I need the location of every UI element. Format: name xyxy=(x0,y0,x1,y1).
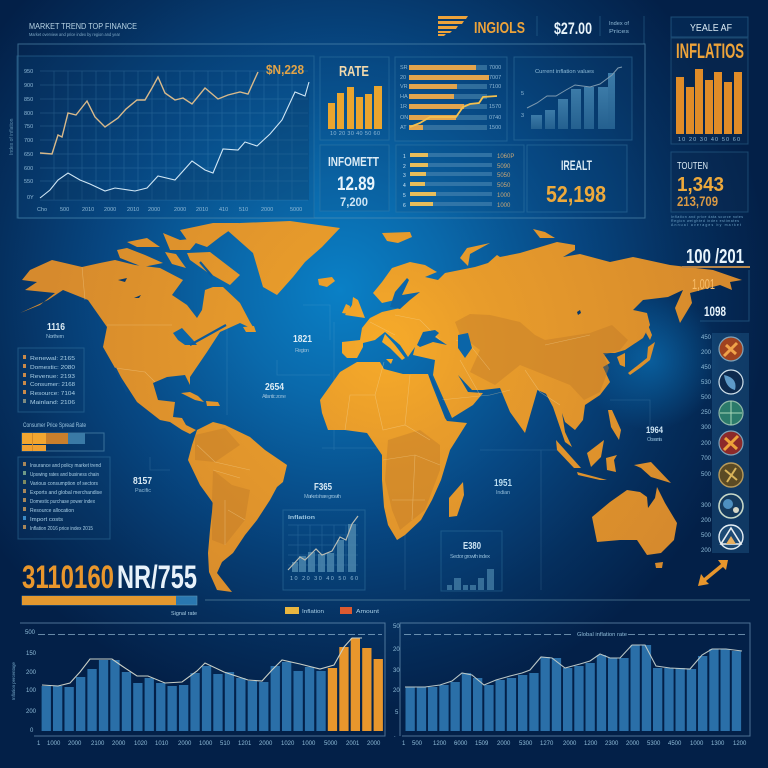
axis labels: 2000 xyxy=(259,741,273,747)
map: uk and ireland xyxy=(345,297,365,318)
axis labels: 100 xyxy=(26,688,37,694)
chart: bottom right xyxy=(393,623,750,747)
text: Annual averages by market xyxy=(671,223,741,227)
map label: f365: F365 xyxy=(314,482,332,493)
axis labels: 510 xyxy=(239,207,248,213)
axis labels: 650 xyxy=(24,152,33,158)
map: south america xyxy=(188,422,287,592)
legend: bottom: Inflation xyxy=(302,609,324,615)
swatches xyxy=(23,355,26,403)
line xyxy=(410,96,497,127)
labels: 7100 xyxy=(489,84,501,90)
panel: year label xyxy=(671,17,748,37)
heading: Consumer Price Spread Rate xyxy=(23,423,87,429)
axis labels: 200 xyxy=(26,709,37,715)
map label: 8157: Pacific xyxy=(135,488,151,494)
axis labels: 2010 xyxy=(82,207,94,213)
icon: green globe xyxy=(719,401,743,425)
rows: Domestic purchase power index xyxy=(30,499,95,505)
orange bars xyxy=(328,638,383,731)
sub value: 213,709 xyxy=(677,193,718,209)
axis labels: 2000 xyxy=(367,741,381,747)
value: 1,343 xyxy=(677,174,724,196)
axis labels: 850 xyxy=(24,97,33,103)
axis labels: 2000 xyxy=(626,741,640,747)
axis labels: 5300 xyxy=(519,741,533,747)
panel: rate bars xyxy=(320,57,389,140)
labels: 200 xyxy=(701,441,712,447)
progress bar xyxy=(22,596,197,617)
panel: inflatios bars xyxy=(671,38,748,144)
labels xyxy=(701,335,712,554)
labels: 200 xyxy=(701,548,712,554)
map: southeast asia islands xyxy=(556,440,581,468)
map label: 2654 xyxy=(262,382,286,400)
axis labels: 1300 xyxy=(711,741,725,747)
axis labels: 2300 xyxy=(605,741,619,747)
axis labels: 50 xyxy=(393,624,400,630)
map: darker regions xyxy=(195,314,628,545)
map label: 1964: Oceania xyxy=(647,437,663,443)
grid xyxy=(288,525,358,572)
map: korea xyxy=(617,353,625,367)
axis labels: 1270 xyxy=(540,741,554,747)
map: svalbard xyxy=(382,232,412,243)
labels: 20 xyxy=(400,75,406,81)
values: 5090 xyxy=(497,164,511,170)
bars xyxy=(676,69,742,134)
title: Market overview and price index by region and year xyxy=(29,32,120,37)
axis labels: 950 xyxy=(24,69,33,75)
map: north america xyxy=(20,260,255,434)
panel: progress rows: 4 xyxy=(403,183,406,189)
chart: line series bottom xyxy=(40,82,309,200)
arrow xyxy=(698,560,728,586)
icon: orange tool xyxy=(719,337,743,361)
axis labels: 410 xyxy=(219,207,228,213)
heading: Inflation xyxy=(288,515,316,521)
map: taymyr islands xyxy=(533,229,555,238)
axis labels: 600 xyxy=(24,166,33,172)
axis labels: 500 xyxy=(25,630,36,636)
heading: ingiols: INGIOLS xyxy=(474,20,525,37)
icon: blue globe xyxy=(719,494,743,518)
line xyxy=(288,516,358,570)
axis labels: 2000 xyxy=(112,741,126,747)
map: interior land mass xyxy=(375,262,700,400)
panel: touten xyxy=(671,152,748,212)
panel: progress rows: 3 xyxy=(403,173,406,179)
map: land masses xyxy=(20,221,742,592)
map label: f365 xyxy=(304,482,341,500)
icon: red tools xyxy=(719,431,743,455)
text: Region weighted index estimates xyxy=(671,219,739,223)
rows: Inflation 2016 price index 2015 xyxy=(30,526,93,532)
text: Prices xyxy=(609,29,629,35)
icon: gold emblem xyxy=(719,463,743,487)
chart grid xyxy=(40,71,308,200)
axis labels: 1201 xyxy=(238,741,252,747)
legend box: items xyxy=(18,457,110,539)
labels: 500 xyxy=(701,472,712,478)
chart: bottom left xyxy=(11,623,385,747)
map label: f365: Market share growth xyxy=(304,494,341,500)
map: australia xyxy=(592,487,677,555)
big figure: 3110160 xyxy=(22,559,114,595)
panel: small bars e380 xyxy=(441,531,502,591)
frame xyxy=(400,623,750,736)
axis labels: 800 xyxy=(24,111,33,117)
bars xyxy=(328,86,382,129)
labels: 450 xyxy=(701,365,712,371)
map label: 1821: 1821 xyxy=(293,334,312,345)
values: 1000 xyxy=(497,203,511,209)
labels: 1570 xyxy=(489,104,501,110)
panel: progress rows: 6 xyxy=(403,203,406,209)
panel: rate bars: 10 20 30 40 50 60 xyxy=(330,131,380,137)
map label: 8157: 8157 xyxy=(133,476,152,487)
map label: 2654: Atlantic zone xyxy=(262,394,286,400)
icon: striped flag logo xyxy=(438,16,468,36)
panel: progress rows xyxy=(396,145,524,212)
axis labels: 700 xyxy=(24,138,33,144)
blue bars xyxy=(42,660,326,731)
labels: 250 xyxy=(701,410,712,416)
values: 1060P xyxy=(497,154,514,160)
axis labels: Index of inflation xyxy=(9,118,15,155)
heading: IREALT xyxy=(561,157,592,173)
value: E380 xyxy=(463,541,481,552)
labels: 200 xyxy=(701,518,712,524)
axis labels: 900 xyxy=(24,83,33,89)
labels: 7007 xyxy=(489,75,501,81)
axis labels: 2010 xyxy=(127,207,139,213)
frame xyxy=(20,623,385,736)
labels: 1R xyxy=(400,104,407,110)
map: water overlays xyxy=(173,278,472,358)
panel: small bars e380: Sector growth index xyxy=(450,554,490,560)
map: borders xyxy=(82,267,590,545)
heading: RATE xyxy=(339,63,369,80)
map: novaya zemlya xyxy=(460,243,490,266)
rows: Insurance and policy market trend xyxy=(30,463,101,469)
world map xyxy=(20,221,742,592)
panel: small trend chart: 10 20 30 40 50 60 xyxy=(290,576,358,582)
connector lines xyxy=(150,305,650,590)
rows: Renewal: 2165 xyxy=(30,356,75,362)
rows: Consumer: 2168 xyxy=(30,382,75,388)
swatches xyxy=(23,462,26,529)
rows: Import costs xyxy=(30,517,63,523)
axis labels: 2001 xyxy=(346,741,360,747)
values: 5050 xyxy=(497,183,511,189)
value: 52,198 xyxy=(546,181,606,207)
axis labels: 5300 xyxy=(647,741,661,747)
header: ingiols and value xyxy=(438,16,629,38)
axis labels: 1000 xyxy=(47,741,61,747)
value block: 100 / 201: 100 /201 xyxy=(686,246,744,268)
title: MARKET TREND TOP FINANCE xyxy=(29,22,137,31)
axis labels: 1000 xyxy=(690,741,704,747)
axis labels xyxy=(11,630,381,747)
axis labels: 5000 xyxy=(290,207,302,213)
panel: progress rows: 2 xyxy=(403,164,406,170)
title xyxy=(29,22,137,37)
labels: 200 xyxy=(701,350,712,356)
axis labels: 150 xyxy=(26,651,37,657)
axis labels: 4500 xyxy=(668,741,682,747)
axis labels: 2010 xyxy=(196,207,208,213)
axis labels: 20 xyxy=(393,688,400,694)
map label: 1821: Region xyxy=(295,348,309,354)
labels: VR xyxy=(400,84,408,90)
map label: 1951: 1951 xyxy=(494,478,512,489)
rows: Domestic: 2080 xyxy=(30,365,75,371)
axis labels: 0Y xyxy=(27,195,34,201)
map label: 1964 xyxy=(646,425,663,443)
map: small dark lakes xyxy=(118,278,581,315)
map label: 1951: Indian xyxy=(496,490,510,496)
panel: blue bar chart with trend: 5 xyxy=(521,91,524,97)
map label: 1116: Northern xyxy=(46,334,64,340)
axis labels: 5000 xyxy=(324,741,338,747)
axis labels xyxy=(393,624,747,747)
value small: 7,200 xyxy=(340,195,368,209)
bars xyxy=(410,153,436,206)
value white: 1098 xyxy=(704,303,726,319)
panel: progress rows: 1 xyxy=(403,154,406,160)
value orange: 1,001 xyxy=(692,276,715,293)
axis labels: 1200 xyxy=(733,741,747,747)
legend: bottom xyxy=(285,607,380,615)
rows: Upswing rates and business chain xyxy=(30,472,99,478)
axis labels: 1200 xyxy=(584,741,598,747)
axis labels: 1509 xyxy=(475,741,489,747)
panel: progress rows: 5 xyxy=(403,193,406,199)
map: africa xyxy=(320,362,467,540)
axis labels: 5 xyxy=(395,710,399,716)
tracks xyxy=(409,65,487,130)
value: price: $27.00 xyxy=(554,19,592,38)
labels: 500 xyxy=(701,395,712,401)
labels: 500 xyxy=(701,533,712,539)
map: italy xyxy=(382,334,405,360)
rows: Various consumption of sectors xyxy=(30,481,98,487)
labels: 450 xyxy=(701,335,712,341)
values: 1000 xyxy=(497,193,511,199)
axis labels: 1000 xyxy=(199,741,213,747)
legend: bottom: Amount xyxy=(356,609,380,615)
panel: inflatios bars: 10 20 30 40 50 60 xyxy=(678,137,740,143)
axis labels: Inflation percentage xyxy=(11,662,16,700)
axis labels: 1 xyxy=(37,741,41,747)
map: greenland xyxy=(227,221,340,295)
small note: Index of xyxy=(609,21,629,27)
map label: 8157 xyxy=(133,476,152,494)
rows xyxy=(30,463,102,532)
axis labels: 2100 xyxy=(91,741,105,747)
axis labels: 0 xyxy=(30,728,34,734)
map label: 2654: 2654 xyxy=(265,382,284,393)
axis labels: 1020 xyxy=(134,741,148,747)
labels: ON xyxy=(400,115,408,121)
axis labels: 510 xyxy=(220,741,231,747)
chart title: Global inflation rate xyxy=(577,632,627,638)
value: 12.89 xyxy=(337,174,375,195)
bars xyxy=(406,645,741,731)
map: caribbean xyxy=(181,392,204,402)
axis labels: 6000 xyxy=(454,741,468,747)
map: eurasia xyxy=(342,242,742,447)
axis labels: 500 xyxy=(60,207,69,213)
axis labels: 1 xyxy=(402,741,406,747)
labels: 0740 xyxy=(489,115,501,121)
labels: 7000 xyxy=(489,65,501,71)
axis labels: 2000 xyxy=(174,207,186,213)
legend box: rates xyxy=(18,348,84,412)
bars xyxy=(447,569,494,590)
labels: 300 xyxy=(701,425,712,431)
axis labels: . xyxy=(394,733,396,739)
segments xyxy=(22,433,46,444)
rows xyxy=(30,356,75,406)
progress bar: Signal rate xyxy=(171,611,197,617)
axis labels: Cho xyxy=(37,207,47,213)
axis labels: 1020 xyxy=(281,741,295,747)
trend line xyxy=(405,645,742,687)
map: madagascar xyxy=(449,482,464,517)
axis labels: 2000 xyxy=(497,741,511,747)
text: Inflation and price data source notes xyxy=(671,215,743,219)
big figure: NR/755 xyxy=(117,559,197,595)
labels: 1500 xyxy=(489,125,501,131)
axis labels xyxy=(9,69,302,213)
axis labels: 1000 xyxy=(302,741,316,747)
trend line xyxy=(42,638,362,686)
map label: 1116 xyxy=(46,322,65,340)
panel: blue bar chart with trend xyxy=(514,57,632,140)
bars xyxy=(292,524,356,572)
axis labels: 20 xyxy=(393,647,400,653)
axis labels: 500 xyxy=(412,741,423,747)
value block: 100 / 201 xyxy=(682,246,750,319)
map: tasmania xyxy=(655,562,663,568)
value label: $N,228 xyxy=(266,62,304,77)
labels: SR xyxy=(400,65,408,71)
panel: ireault xyxy=(527,145,627,212)
panel: horizontal bars with line xyxy=(395,57,507,141)
panel: small trend chart xyxy=(283,510,365,590)
axis labels: 2000 xyxy=(178,741,192,747)
panel: blue bar chart with trend: 3 xyxy=(521,113,524,119)
bars xyxy=(531,73,615,129)
panel: main line chart xyxy=(9,56,314,218)
labels: AT xyxy=(400,125,407,131)
heading: TOUTEN xyxy=(677,161,708,172)
labels: HA xyxy=(400,94,408,100)
axis labels: 2000 xyxy=(563,741,577,747)
swatch red xyxy=(340,607,352,614)
tracks xyxy=(410,153,492,206)
axis labels: 2000 xyxy=(148,207,160,213)
panel: year label: YEALE AF xyxy=(690,23,732,34)
chart title: Current inflation values xyxy=(535,69,594,75)
labels: 700 xyxy=(701,456,712,462)
rows: Revenue: 2193 xyxy=(30,374,75,380)
icon: triangle emblem xyxy=(719,525,743,549)
stacked legend bar xyxy=(22,423,104,451)
axis labels: 2000 xyxy=(68,741,82,747)
axis labels: 2000 xyxy=(261,207,273,213)
icon: blue leaf xyxy=(719,370,743,394)
rows: Resource: 7104 xyxy=(30,391,75,397)
swatch yellow xyxy=(285,607,299,614)
map: arctic islands xyxy=(117,248,163,267)
labels xyxy=(400,65,501,131)
labels: 530 xyxy=(701,380,712,386)
labels: 300 xyxy=(701,503,712,509)
values: 5050 xyxy=(497,173,511,179)
axis labels: 550 xyxy=(24,179,33,185)
map label: 1951 xyxy=(494,478,512,496)
values xyxy=(497,154,514,209)
panel: infomett xyxy=(320,145,389,211)
axis labels: 1010 xyxy=(155,741,169,747)
axis labels: 750 xyxy=(24,124,33,130)
map: japan xyxy=(628,342,655,375)
axis labels: 200 xyxy=(26,670,37,676)
map label: 1821 xyxy=(293,334,312,354)
trend line xyxy=(527,67,622,108)
rows: Mainland: 2106 xyxy=(30,400,75,406)
axis labels: 2000 xyxy=(104,207,116,213)
map: iceland xyxy=(318,277,335,287)
rows: Resource allocation xyxy=(30,508,74,514)
axis labels: 1200 xyxy=(433,741,447,747)
rows: Exports and global merchandise xyxy=(30,490,102,496)
panel: icons column xyxy=(701,333,749,554)
heading: INFOMETT xyxy=(328,154,379,169)
map: mediterranean islands xyxy=(386,359,393,364)
separator xyxy=(205,599,750,601)
axis labels: 30 xyxy=(393,668,400,674)
map label: 1964: 1964 xyxy=(646,425,663,435)
bars xyxy=(409,65,489,130)
map label: 1116: 1116 xyxy=(47,322,65,333)
chart: line series top xyxy=(40,72,258,154)
